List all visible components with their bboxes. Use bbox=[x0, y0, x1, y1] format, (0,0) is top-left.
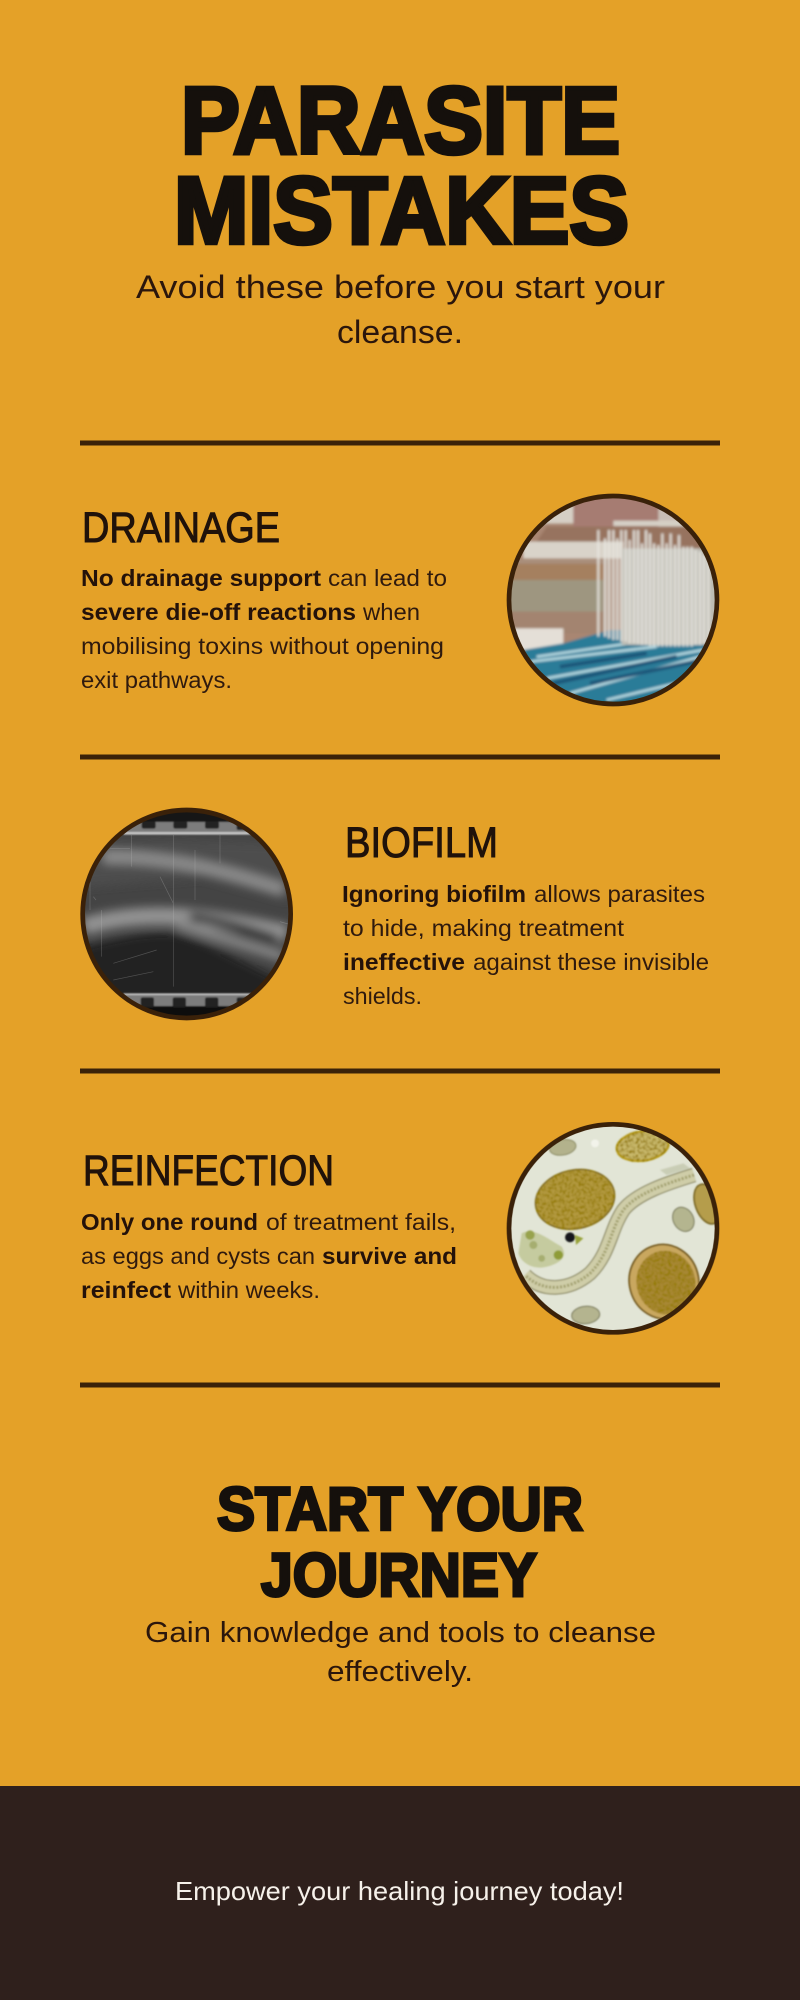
text block: biofilm: allows parasites bbox=[534, 881, 705, 907]
text block: biofilm: Ignoring biofilm bbox=[342, 881, 526, 907]
heading: biofilm: BIOFILM bbox=[345, 819, 498, 867]
text block: drainage: mobilising toxins without opening bbox=[81, 633, 444, 659]
heading: drainage: DRAINAGE bbox=[82, 504, 280, 552]
image: parasite eggs and larva under microscope bbox=[503, 1120, 726, 1340]
heading: reinfection: REINFECTION bbox=[83, 1147, 334, 1195]
footer text: Empower your healing journey today! bbox=[175, 1876, 624, 1906]
panel: reinfection bbox=[81, 1120, 726, 1340]
text block: reinfection: survive and bbox=[322, 1243, 457, 1269]
text block: drainage: when bbox=[362, 599, 420, 625]
text block: drainage bbox=[81, 565, 447, 693]
text block: reinfection: of treatment fails, bbox=[266, 1209, 456, 1235]
heading: start your journey bbox=[217, 1475, 583, 1609]
text block: drainage: can lead to bbox=[328, 565, 447, 591]
text block: biofilm: ineffective bbox=[343, 949, 465, 975]
subtitle: Avoid these before you start your bbox=[136, 269, 665, 305]
title: MISTAKES bbox=[174, 158, 629, 264]
title: PARASITE bbox=[181, 68, 620, 174]
text block: reinfection: as eggs and cysts can bbox=[81, 1243, 315, 1269]
panel: biofilm bbox=[80, 807, 709, 1021]
text block: biofilm bbox=[342, 881, 709, 1009]
call to action bbox=[145, 1475, 656, 1688]
text block: call to action bbox=[145, 1617, 656, 1688]
image: loom with blue threads bbox=[506, 494, 720, 706]
text block: biofilm: to hide, making treatment bbox=[343, 915, 625, 941]
footer bbox=[0, 1786, 800, 2000]
footer band bbox=[0, 1786, 800, 2000]
text block: drainage: exit pathways. bbox=[81, 667, 232, 693]
header bbox=[136, 68, 665, 350]
panel: drainage bbox=[81, 487, 730, 713]
text block: reinfection bbox=[81, 1209, 457, 1303]
text block: reinfection: Only one round bbox=[81, 1209, 258, 1235]
image: scratched film strip bbox=[80, 807, 293, 1021]
heading: start your journey: JOURNEY bbox=[261, 1541, 537, 1609]
title bbox=[174, 68, 629, 264]
text block: drainage: severe die-off reactions bbox=[81, 599, 356, 625]
text block: biofilm: shields. bbox=[343, 983, 422, 1009]
text block: biofilm: against these invisible bbox=[473, 949, 709, 975]
text block: call to action: effectively. bbox=[327, 1656, 473, 1688]
text block: drainage: No drainage support bbox=[81, 565, 321, 591]
subtitle bbox=[136, 269, 665, 350]
text block: reinfection: within weeks. bbox=[177, 1277, 320, 1303]
heading: start your journey: START YOUR bbox=[217, 1475, 583, 1543]
text block: call to action: Gain knowledge and tools to cleanse bbox=[145, 1617, 656, 1649]
text block: reinfection: reinfect bbox=[81, 1277, 171, 1303]
subtitle: cleanse. bbox=[337, 314, 463, 350]
